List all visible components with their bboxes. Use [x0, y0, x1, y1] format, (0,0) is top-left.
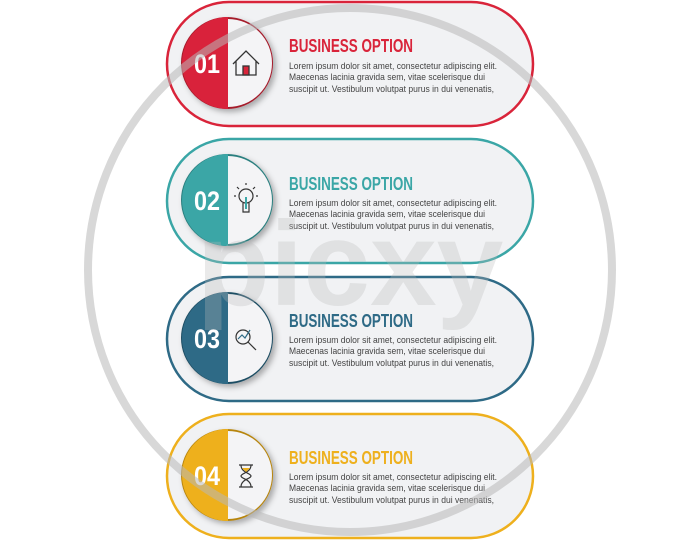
card 4: BUSINESS OPTION	[289, 448, 413, 468]
circle badge 4	[181, 429, 273, 521]
watermark circle	[88, 8, 612, 532]
icon: light bulb	[234, 183, 258, 212]
card 2: Lorem ipsum dolor sit amet, consectetur adipiscing elit.	[289, 198, 497, 209]
card 3: 03	[194, 324, 220, 354]
card 4: Lorem ipsum dolor sit amet, consectetur adipiscing elit.	[289, 472, 497, 483]
card 3: BUSINESS OPTION	[289, 311, 413, 331]
card 4: Maecenas lacinia gravida sem, vitae scelerisque dui	[289, 483, 485, 494]
card 2: 02	[194, 186, 220, 216]
circle badge 3	[181, 292, 273, 384]
card 1: 01	[194, 49, 220, 79]
circle badge 2	[181, 154, 273, 246]
icon: house	[233, 51, 259, 75]
icon: magnifier chart	[236, 330, 256, 350]
card 4: suscipit ut. Vestibulum volutpat purus in dui venenatis,	[289, 495, 494, 506]
card 1: BUSINESS OPTION	[289, 36, 413, 56]
card 1: suscipit ut. Vestibulum volutpat purus in dui venenatis,	[289, 84, 494, 95]
watermark text: picxy	[197, 197, 504, 331]
card 2	[167, 139, 533, 263]
card 1	[167, 2, 533, 126]
card 2: suscipit ut. Vestibulum volutpat purus in dui venenatis,	[289, 221, 494, 232]
circle badge 1	[181, 17, 273, 109]
card 4: 04	[194, 461, 220, 491]
card 3: Maecenas lacinia gravida sem, vitae scelerisque dui	[289, 346, 485, 357]
card 4	[167, 414, 533, 538]
card 3	[167, 277, 533, 401]
card 2: BUSINESS OPTION	[289, 174, 413, 194]
card 3: Lorem ipsum dolor sit amet, consectetur adipiscing elit.	[289, 335, 497, 346]
card 1: Maecenas lacinia gravida sem, vitae scelerisque dui	[289, 72, 485, 83]
card 3: suscipit ut. Vestibulum volutpat purus in dui venenatis,	[289, 358, 494, 369]
card 2: Maecenas lacinia gravida sem, vitae scelerisque dui	[289, 209, 485, 220]
card 1: Lorem ipsum dolor sit amet, consectetur adipiscing elit.	[289, 61, 497, 72]
icon: hourglass	[239, 465, 253, 487]
